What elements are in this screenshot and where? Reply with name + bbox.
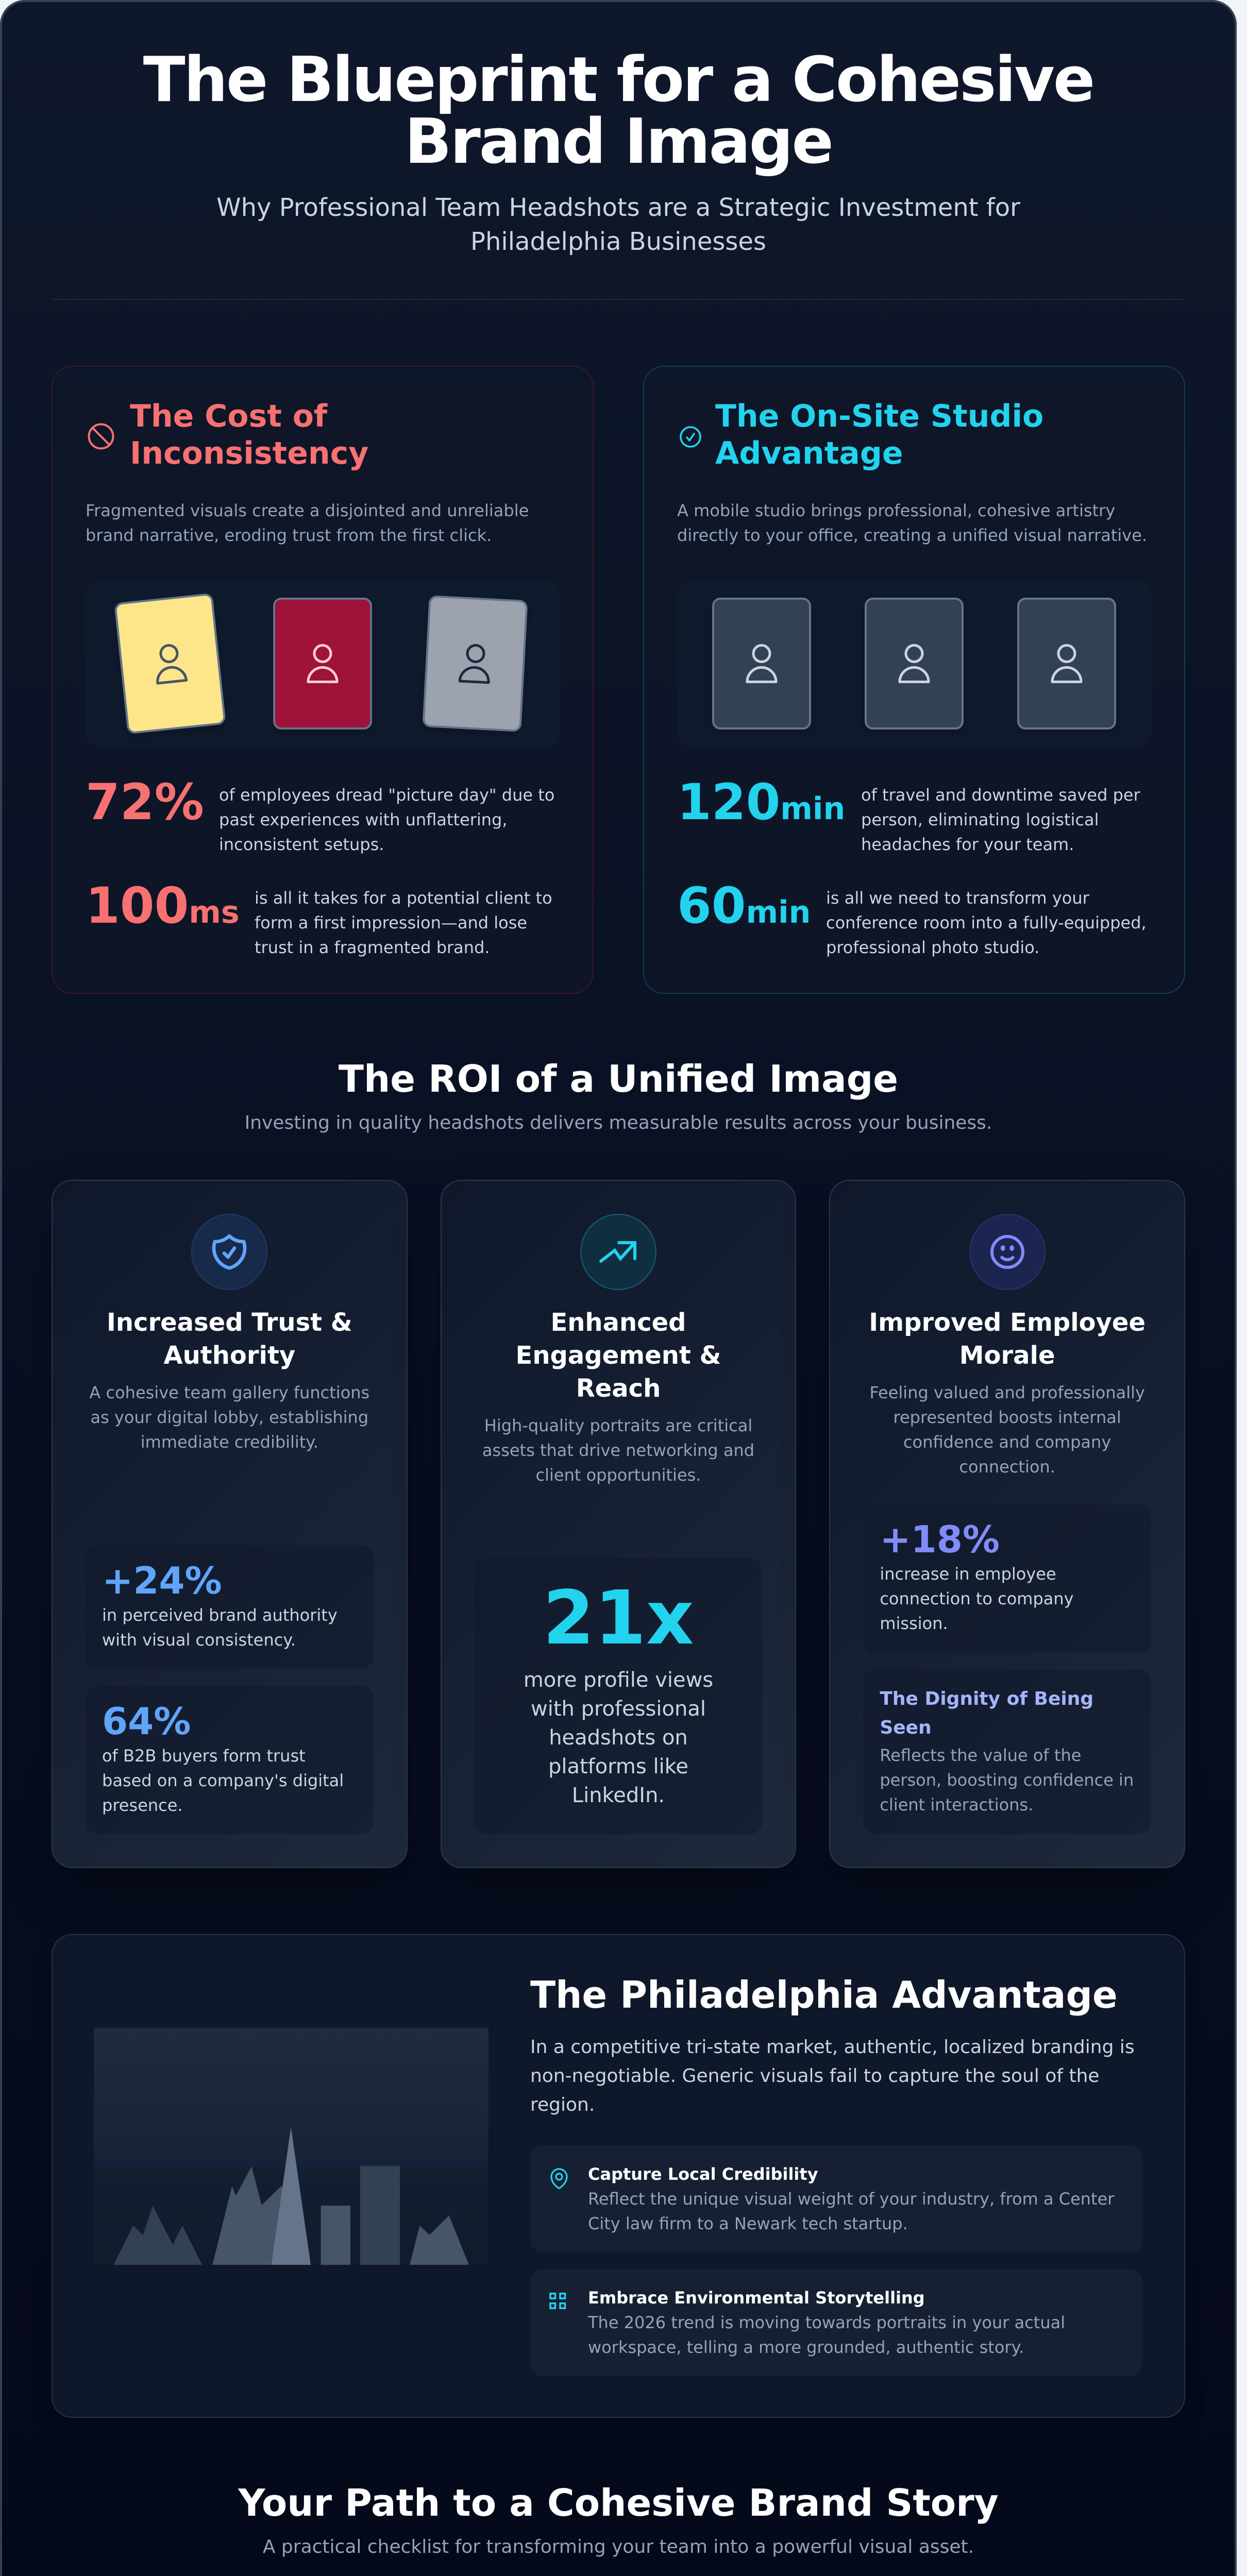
title: Embrace Environmental Storytelling [588,2288,925,2308]
heading [715,398,1043,471]
title [143,44,1093,178]
text: mission. [880,1614,948,1633]
stat: 60min: 60min [677,877,811,935]
description: brand narrative, eroding trust from the first click. [86,526,492,545]
unified photo strip [677,581,1151,746]
description [86,501,529,545]
title [829,1306,1185,1372]
skyline shapes [94,2028,488,2265]
icon: smile [969,1214,1046,1290]
title: Enhanced [550,1308,686,1337]
title: Engagement & [516,1341,721,1370]
description [829,1380,1185,1479]
text [880,1743,1134,1817]
stat text: 60min: conference room into a fully-equipped, [826,913,1147,933]
stat: 100ms: 100ms [86,877,240,935]
text: headshots on [549,1726,688,1750]
panel: the cost of inconsistency [52,366,594,994]
description: connection. [959,1457,1055,1477]
panel: the on-site studio advantage [643,366,1185,994]
stat: 120min: 120min [677,773,845,831]
text: client interactions. [880,1795,1033,1815]
box: the dignity of being seen [863,1669,1151,1834]
description: Fragmented visuals create a disjointed and unreliable [86,501,529,520]
stat text: 60min: professional photo studio. [826,938,1039,957]
number: 21x [543,1574,694,1661]
stat text: 72% [219,785,554,854]
stat text: 100ms: is all it takes for a potential client to [255,888,552,908]
title: Brand Image [405,106,832,178]
text [880,1562,1074,1636]
description: A mobile studio brings professional, cohesive artistry [677,501,1115,520]
description [89,1383,369,1452]
stat: 72%: 72% [86,773,204,831]
heading [130,398,368,471]
text [588,2187,1114,2236]
photo card: grey [422,595,528,732]
header [52,44,1185,300]
title: Capture Local Credibility [588,2164,818,2184]
subheading: Investing in quality headshots delivers measurable results across your business. [245,1112,992,1133]
heading: The On-Site Studio [715,398,1043,434]
text: LinkedIn. [572,1784,665,1807]
description: A cohesive team gallery functions [89,1383,369,1402]
photo card 1 [712,598,811,730]
number: +24% [102,1559,222,1602]
text: presence. [102,1795,183,1815]
subtitle: Why Professional Team Headshots are a Strategic Investment for [216,193,1020,222]
icon: check circle [680,426,701,448]
stat box: 64% [86,1686,374,1834]
stat text: 100ms: trust in a fragmented brand. [255,938,490,957]
text: Reflects the value of the [880,1745,1081,1765]
text: Reflect the unique visual weight of your industry, from a Center [588,2189,1114,2209]
stat text: 120min: headaches for your team. [861,835,1074,854]
text: of B2B buyers form trust [102,1746,306,1766]
text: with professional [531,1697,706,1721]
icon: trending up [580,1214,656,1290]
photo card 3 [1017,598,1116,730]
stat text: 60min: is all we need to transform your [826,888,1089,908]
heading: The Cost of [130,398,327,434]
description: confidence and company [903,1432,1111,1452]
text: more profile views [524,1668,713,1692]
title: Increased Trust & [107,1308,352,1337]
paragraph: In a competitive tri-state market, authentic, localized branding is [530,2037,1135,2058]
title: Reach [576,1374,661,1403]
illustration: city skyline [94,2028,488,2265]
icon: grid [547,2290,571,2314]
text: workspace, telling a more grounded, authentic story. [588,2337,1024,2357]
callout: capture local credibility [530,2145,1142,2252]
text [102,1746,344,1815]
text: platforms like [548,1755,688,1778]
text: with visual consistency. [102,1630,296,1650]
title: Morale [959,1341,1055,1370]
subtitle: Philadelphia Businesses [470,227,766,256]
stat text: 120min: of travel and downtime saved per [861,785,1140,805]
stat box: +18% [863,1504,1151,1653]
text [588,2310,1065,2360]
panel: the philadelphia advantage [52,1934,1185,2418]
panel: enhanced engagement and reach [441,1180,796,1868]
title: Seen [880,1717,932,1738]
stat box: 21x [475,1558,762,1834]
stat box: +24% [86,1545,374,1669]
title: Authority [163,1341,295,1370]
number: +18% [880,1518,1000,1561]
icon: shield check [191,1214,267,1290]
paragraph: region. [530,2094,595,2115]
text: The 2026 trend is moving towards portraits in your actual [588,2313,1065,2332]
description: as your digital lobby, establishing [91,1408,368,1427]
title: The Blueprint for a Cohesive [143,44,1093,116]
callout: embrace environmental storytelling [530,2269,1142,2376]
description: directly to your office, creating a unified visual narrative. [677,526,1147,545]
section heading: path [52,2482,1185,2562]
text: increase in employee [880,1564,1056,1584]
stat text: 72%: of employees dread "picture day" due to [219,785,554,805]
description: represented boosts internal [894,1408,1121,1427]
subheading: A practical checklist for transforming your team into a powerful visual asset. [263,2536,974,2557]
heading: Inconsistency [130,435,368,471]
icon: ban [88,423,114,449]
text: in perceived brand authority [102,1605,338,1625]
section heading: ROI [245,1057,992,1133]
text: person, boosting confidence in [880,1770,1134,1790]
description [441,1413,796,1487]
title [880,1685,1093,1742]
title [516,1308,721,1403]
text: connection to company [880,1589,1074,1608]
icon: map pin [547,2166,571,2191]
description: client opportunities. [536,1465,701,1485]
description: High-quality portraits are critical [484,1416,752,1435]
heading: Your Path to a Cohesive Brand Story [238,2481,999,2524]
stat text: 120min [861,785,1140,854]
description [677,501,1147,545]
stat text: 100ms: form a first impression—and lose [255,913,527,933]
paragraph: non-negotiable. Generic visuals fail to capture the soul of the [530,2065,1100,2087]
heading: The Philadelphia Advantage [530,1973,1118,2016]
photo card 2 [865,598,964,730]
text: based on a company's digital [102,1771,344,1790]
description: Feeling valued and professionally [869,1383,1145,1402]
title: The Dignity of Being [880,1688,1093,1709]
panel: improved employee morale [829,1180,1185,1868]
text: City law firm to a Newark tech startup. [588,2214,908,2233]
panel: increased trust and authority [52,1180,408,1868]
description: assets that drive networking and [482,1440,754,1460]
heading: Advantage [715,435,903,471]
text [475,1666,762,1810]
photo card: yellow [114,593,226,734]
stat text: 100ms [255,888,552,957]
inconsistent photo strip [86,581,560,746]
paragraph [530,2033,1135,2120]
title [107,1308,352,1370]
heading: The ROI of a Unified Image [339,1057,898,1100]
stat text: 72%: inconsistent setups. [219,835,384,854]
subtitle [216,193,1020,256]
stat text: 60min [826,888,1147,957]
stat text: 72%: past experiences with unflattering, [219,810,507,829]
photo card: maroon [273,598,372,730]
stat text: 120min: person, eliminating logistical [861,810,1099,829]
description: immediate credibility. [141,1432,318,1452]
number: 64% [102,1700,191,1743]
title: Improved Employee [869,1308,1145,1337]
text [102,1605,338,1650]
